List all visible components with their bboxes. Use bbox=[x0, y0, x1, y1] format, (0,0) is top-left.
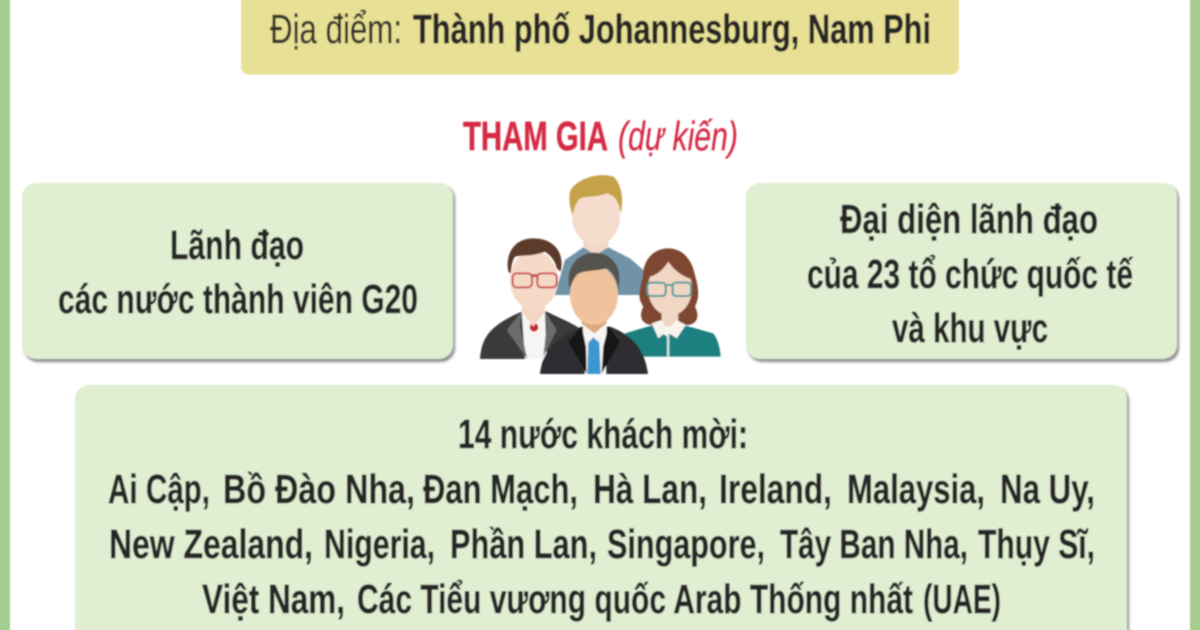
panel: international organisations bbox=[746, 183, 1179, 362]
panel: guest countries: Na Uy, bbox=[1000, 466, 1095, 512]
location banner: Thành phố Johannesburg, Nam Phi bbox=[413, 6, 931, 52]
panel: guest countries: Các Tiểu vương quốc Arab Thống nhất bbox=[357, 576, 913, 622]
panel: guest countries: Thụy Sĩ, bbox=[978, 521, 1095, 567]
heading: participants: THAM GIA bbox=[463, 113, 608, 159]
icon: group of people bbox=[480, 175, 721, 374]
left border bar bbox=[0, 0, 10, 630]
woman bbox=[625, 248, 721, 357]
heading: participants: (dự kiến) bbox=[618, 113, 738, 159]
left man bbox=[480, 238, 582, 359]
panel: guest countries: (UAE) bbox=[923, 576, 1001, 622]
panel: guest countries: Bồ Đào Nha, bbox=[223, 466, 415, 512]
back man bbox=[555, 175, 643, 295]
location banner bbox=[241, 0, 959, 74]
panel: G20 leaders: Lãnh đạo bbox=[170, 222, 304, 268]
location banner: Địa điểm: bbox=[270, 6, 402, 52]
panel: G20 leaders bbox=[22, 183, 455, 362]
panel: guest countries: 14 nước khách mời: bbox=[458, 411, 748, 457]
panel: guest countries: Việt Nam, bbox=[202, 576, 345, 622]
panel: guest countries: New Zealand, bbox=[109, 521, 313, 567]
front man bbox=[540, 253, 648, 374]
panel: international organisations: Đại diện lãnh đạo bbox=[840, 196, 1098, 242]
panel: G20 leaders: các nước thành viên G20 bbox=[58, 276, 418, 322]
panel: guest countries: Nigeria, bbox=[324, 521, 435, 567]
panel: international organisations: và khu vực bbox=[892, 305, 1048, 351]
panel: guest countries: Singapore, bbox=[607, 521, 765, 567]
panel: guest countries: Ai Cập, bbox=[108, 466, 210, 512]
panel: guest countries bbox=[75, 385, 1129, 630]
panel: guest countries: Malaysia, bbox=[847, 466, 985, 512]
panel: guest countries: Hà Lan, bbox=[593, 466, 707, 512]
panel: guest countries: Đan Mạch, bbox=[423, 466, 578, 512]
right border bar bbox=[1190, 0, 1200, 630]
panel: guest countries: Ireland, bbox=[719, 466, 832, 512]
panel: guest countries: Phần Lan, bbox=[450, 521, 597, 567]
panel: guest countries: Tây Ban Nha, bbox=[780, 521, 968, 567]
